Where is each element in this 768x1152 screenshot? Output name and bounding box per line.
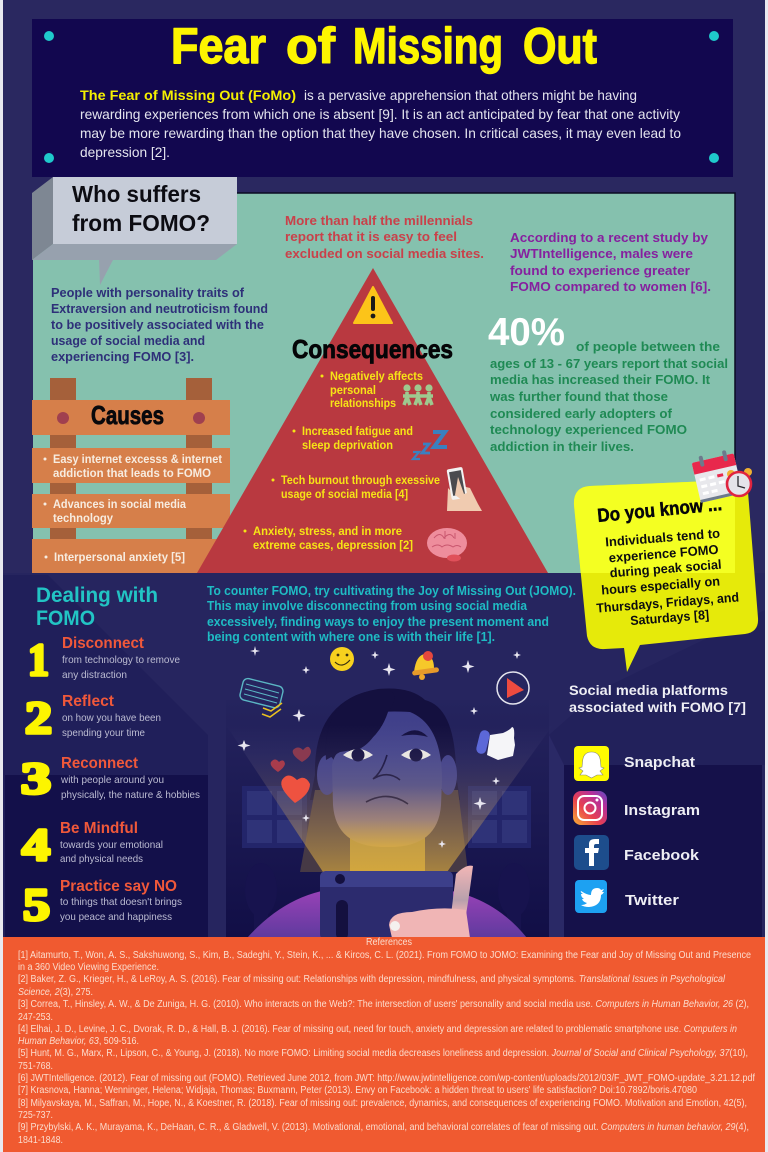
stat: 40 percent: was further found that those bbox=[489, 389, 668, 404]
heading: social media platforms bbox=[569, 682, 746, 715]
consequences list: Negatively affects bbox=[330, 371, 423, 383]
text: joy of missing out: This may involve disconnecting from using social media bbox=[207, 599, 528, 613]
references list: 751-768. bbox=[18, 1061, 53, 1072]
title: Fear bbox=[171, 18, 266, 74]
references list bbox=[18, 950, 755, 1146]
causes list: Advances in social media bbox=[53, 499, 187, 511]
step 5: practice say no: 5 bbox=[23, 879, 50, 930]
step 4: be mindful bbox=[22, 820, 163, 870]
consequences list bbox=[244, 371, 440, 552]
references heading: References bbox=[366, 937, 412, 948]
references list: Human Behavior, 63, 509-516. bbox=[18, 1036, 139, 1047]
step 2: reflect bbox=[25, 692, 161, 743]
teal panel bbox=[33, 193, 735, 573]
step 2: reflect: spending your time bbox=[62, 727, 145, 739]
consequences list: extreme cases, depression [2] bbox=[253, 540, 413, 552]
step 2: reflect: Reflect bbox=[62, 693, 114, 710]
windows bbox=[242, 786, 531, 848]
references list: 725-737. bbox=[18, 1110, 53, 1121]
step 1: disconnect: Disconnect bbox=[62, 635, 144, 652]
references list: 247-253. bbox=[18, 1012, 53, 1023]
callout text bbox=[596, 526, 740, 628]
title bbox=[171, 18, 597, 74]
heading: dealing with FOMO: Dealing with bbox=[36, 584, 158, 607]
social: instagram bbox=[573, 791, 700, 825]
step 3: reconnect bbox=[21, 754, 200, 803]
ears bbox=[317, 755, 337, 795]
references list: [2] Baker, Z. G., Krieger, H., & LeRoy, A. S. (2016). Fear of missing out: Relationships with depression, mindfulness, and physical symptoms. Translational Issues in Psychological bbox=[18, 974, 726, 985]
consequences heading: Consequences bbox=[292, 334, 453, 364]
text: millennials: report that it is easy to feel bbox=[285, 229, 457, 244]
intro text bbox=[80, 87, 681, 160]
step 3: reconnect: 3 bbox=[21, 754, 51, 803]
icon: smiley bbox=[330, 647, 354, 671]
step 1: disconnect: any distraction bbox=[62, 669, 127, 681]
step 5: practice say no: you peace and happiness bbox=[60, 911, 172, 923]
sparkles bbox=[238, 646, 521, 848]
header corner dots bbox=[44, 31, 719, 163]
title: of bbox=[286, 18, 335, 74]
icon: phone in hand bbox=[447, 467, 482, 511]
face bbox=[332, 712, 442, 847]
icon: hearts bbox=[271, 747, 311, 803]
text: personality traits: experiencing FOMO [3]. bbox=[51, 349, 194, 364]
step 2: reflect: 2 bbox=[25, 692, 52, 743]
references list: [5] Hunt, M. G., Marx, R., Lipson, C., & Young, J. (2018). No more FOMO: Limiting social media decreases loneliness and depression. Journal of Social and Clinical Psychology, 37(10), bbox=[18, 1048, 748, 1059]
trees bbox=[245, 863, 530, 938]
stat: 40 percent: 40% bbox=[488, 311, 565, 354]
text: personality traits: to be positively associated with the bbox=[51, 317, 264, 332]
text: joy of missing out bbox=[207, 584, 576, 644]
text: millennials: excluded on social media sites. bbox=[285, 246, 484, 261]
callout text: Individuals tend to bbox=[605, 526, 721, 550]
title: Missing bbox=[353, 18, 503, 74]
references list: [4] Elhai, J. D., Levine, J. C., Dvorak, R. D., & Hall, B. J. (2016). Fear of missing out, need for touch, anxiety and depression are related to problematic smartphone use. Computers in bbox=[18, 1024, 737, 1035]
text: joy of missing out: being content with where one is with their life [1]. bbox=[207, 630, 495, 644]
text: personality traits: usage of social media and bbox=[51, 333, 205, 348]
references list: Science, 2(3), 275. bbox=[18, 987, 93, 998]
hair bbox=[310, 688, 460, 800]
text: JWTIntelligence study: According to a recent study by bbox=[510, 230, 709, 245]
heading: dealing with FOMO bbox=[36, 584, 158, 630]
hair fringe bbox=[326, 690, 395, 760]
callout: who suffers from FOMO bbox=[32, 177, 237, 285]
step 4: be mindful: towards your emotional bbox=[60, 839, 163, 851]
stat: 40 percent: addiction in their lives. bbox=[490, 439, 634, 454]
social: facebook: Facebook bbox=[624, 847, 700, 864]
icon: notification bell bbox=[412, 651, 439, 680]
causes list: addiction that leads to FOMO bbox=[53, 468, 211, 480]
body bbox=[247, 888, 527, 938]
causes list bbox=[44, 454, 222, 564]
icon: calendar and clock bbox=[691, 448, 752, 503]
step 1: disconnect bbox=[28, 634, 180, 685]
heading: dealing with FOMO: FOMO bbox=[36, 607, 95, 630]
light beam bbox=[226, 725, 553, 872]
causes heading: Causes bbox=[91, 400, 164, 430]
step 2: reflect: on how you have been bbox=[62, 712, 161, 724]
step 3: reconnect: with people around you bbox=[60, 774, 164, 786]
consequences list: relationships bbox=[330, 398, 396, 410]
social: twitter bbox=[575, 880, 679, 913]
text: joy of missing out: excessively, finding ways to enjoy the present moment and bbox=[207, 615, 549, 629]
text: personality traits: Extraversion and neutroticism found bbox=[51, 301, 268, 316]
causes signpost bbox=[32, 378, 230, 573]
icon: play button bbox=[497, 672, 529, 704]
intro text: rewarding experiences from which one is absent [9]. It is an act anticipated by fear that one activity bbox=[80, 106, 680, 122]
title: Out bbox=[523, 18, 597, 74]
icon: brain bbox=[427, 528, 467, 562]
callout: do you know bbox=[574, 480, 758, 672]
text: millennials bbox=[285, 213, 484, 261]
stat: 40 percent: ages of 13 - 67 years report that social bbox=[490, 356, 728, 371]
text: millennials: More than half the millennials bbox=[285, 213, 473, 228]
step 4: be mindful: and physical needs bbox=[60, 853, 143, 865]
step 1: disconnect: 1 bbox=[28, 634, 49, 685]
step 4: be mindful: 4 bbox=[22, 820, 50, 870]
intro text: may be more rewarding than the option that they have chosen. In critical cases, it may even lead to bbox=[80, 125, 681, 141]
references list: 1841-1848. bbox=[18, 1135, 63, 1146]
intro text: The Fear of Missing Out (FoMo) bbox=[80, 87, 296, 103]
step 5: practice say no: to things that doesn't brings bbox=[60, 896, 182, 908]
stat: 40 percent: of people between the bbox=[576, 339, 720, 354]
callout heading: Do you know ... bbox=[596, 494, 723, 527]
references list: [9] Przybylski, A. K., Murayama, K., DeHaan, C. R., & Gladwell, V. (2013). Motivational, emotional, and behavioral correlates of fear of missing out. Computers in human behavior, 29(4), bbox=[18, 1122, 749, 1133]
intro text: is a pervasive apprehension that others might be having bbox=[304, 87, 637, 103]
causes list: Easy internet excesss & internet bbox=[53, 454, 222, 466]
callout text: during peak social bbox=[609, 557, 722, 580]
text: joy of missing out: To counter FOMO, try cultivating the Joy of Missing Out (JOMO). bbox=[207, 584, 576, 598]
callout text: experience FOMO bbox=[608, 542, 719, 565]
callout text: Saturdays [8] bbox=[630, 607, 710, 628]
hand bbox=[389, 866, 473, 938]
callout: who suffers from FOMO: from FOMO? bbox=[72, 210, 210, 236]
callout: who suffers from FOMO: Who suffers bbox=[72, 181, 201, 207]
social: instagram: Instagram bbox=[624, 802, 700, 819]
neck bbox=[350, 835, 425, 873]
intro text: depression [2]. bbox=[80, 144, 170, 160]
consequences list: usage of social media [4] bbox=[281, 489, 408, 501]
text: JWTIntelligence study: found to experience greater bbox=[510, 263, 690, 278]
step 4: be mindful: Be Mindful bbox=[60, 820, 138, 837]
consequences list: personal bbox=[330, 385, 376, 397]
social: facebook bbox=[574, 835, 700, 870]
references list: [7] Krasnova, Hanna; Wenninger, Helena; Widjaja, Thomas; Buxmann, Peter (2013). Envy on Facebook: a hidden threat to users' life satisfaction? Doi:10.7892/boris.47080 bbox=[18, 1085, 697, 1096]
phone bbox=[320, 871, 453, 941]
consequences list: sleep deprivation bbox=[302, 440, 393, 452]
consequences pyramid bbox=[197, 268, 548, 573]
step 3: reconnect: Reconnect bbox=[61, 755, 138, 772]
callout text: Thursdays, Fridays, and bbox=[596, 589, 740, 616]
consequences list: Increased fatigue and bbox=[302, 426, 413, 438]
stat: 40 percent: considered early adopters of bbox=[490, 406, 673, 421]
icon: sleeping zzz bbox=[413, 432, 447, 459]
causes list: Interpersonal anxiety [5] bbox=[54, 552, 185, 564]
consequences list: Anxiety, stress, and in more bbox=[253, 526, 402, 538]
stat: 40 percent bbox=[488, 311, 728, 454]
social: snapchat bbox=[574, 746, 695, 781]
step 5: practice say no bbox=[23, 878, 182, 930]
icon: warning sign bbox=[354, 287, 392, 323]
social: snapchat: Snapchat bbox=[624, 754, 695, 771]
step 3: reconnect: physically, the nature & hobbies bbox=[61, 789, 200, 801]
text: personality traits: People with personality traits of bbox=[51, 285, 245, 300]
header panel bbox=[32, 18, 733, 177]
callout text: hours especially on bbox=[601, 573, 721, 598]
icon: people holding hands bbox=[403, 384, 433, 405]
illustration: person looking at phone bbox=[226, 646, 553, 941]
references list: [3] Correa, T., Hinsley, A. W., & De Zuniga, H. G. (2010). Who interacts on the Web?: The intersection of users' personality and social media use. Computers in Human Behavior, 26 (2), bbox=[18, 999, 749, 1010]
heading: social media platforms: associated with FOMO [7] bbox=[569, 699, 746, 715]
step 5: practice say no: Practice say NO bbox=[60, 878, 177, 895]
step 1: disconnect: from technology to remove bbox=[62, 654, 180, 666]
icon: thumbs up bbox=[475, 727, 515, 760]
stat: 40 percent: technology experienced FOMO bbox=[490, 422, 687, 437]
nose and mouth bbox=[366, 755, 408, 804]
stat: 40 percent: media has increased their FOMO. It bbox=[490, 372, 711, 387]
text: personality traits bbox=[51, 285, 268, 364]
references panel bbox=[3, 937, 765, 1152]
social: twitter: Twitter bbox=[625, 892, 679, 909]
references list: in a 360 Video Viewing Experience. bbox=[18, 962, 159, 973]
icon: chat bubble with checks bbox=[239, 677, 284, 717]
text: JWTIntelligence study: FOMO compared to women [6]. bbox=[510, 279, 711, 294]
text: JWTIntelligence study: JWTIntelligence, males were bbox=[510, 246, 693, 261]
consequences list: Tech burnout through exessive bbox=[281, 475, 440, 487]
eyes bbox=[343, 730, 431, 762]
heading: social media platforms: Social media platforms bbox=[569, 682, 728, 698]
causes list: technology bbox=[53, 513, 114, 525]
text: JWTIntelligence study bbox=[510, 230, 711, 294]
